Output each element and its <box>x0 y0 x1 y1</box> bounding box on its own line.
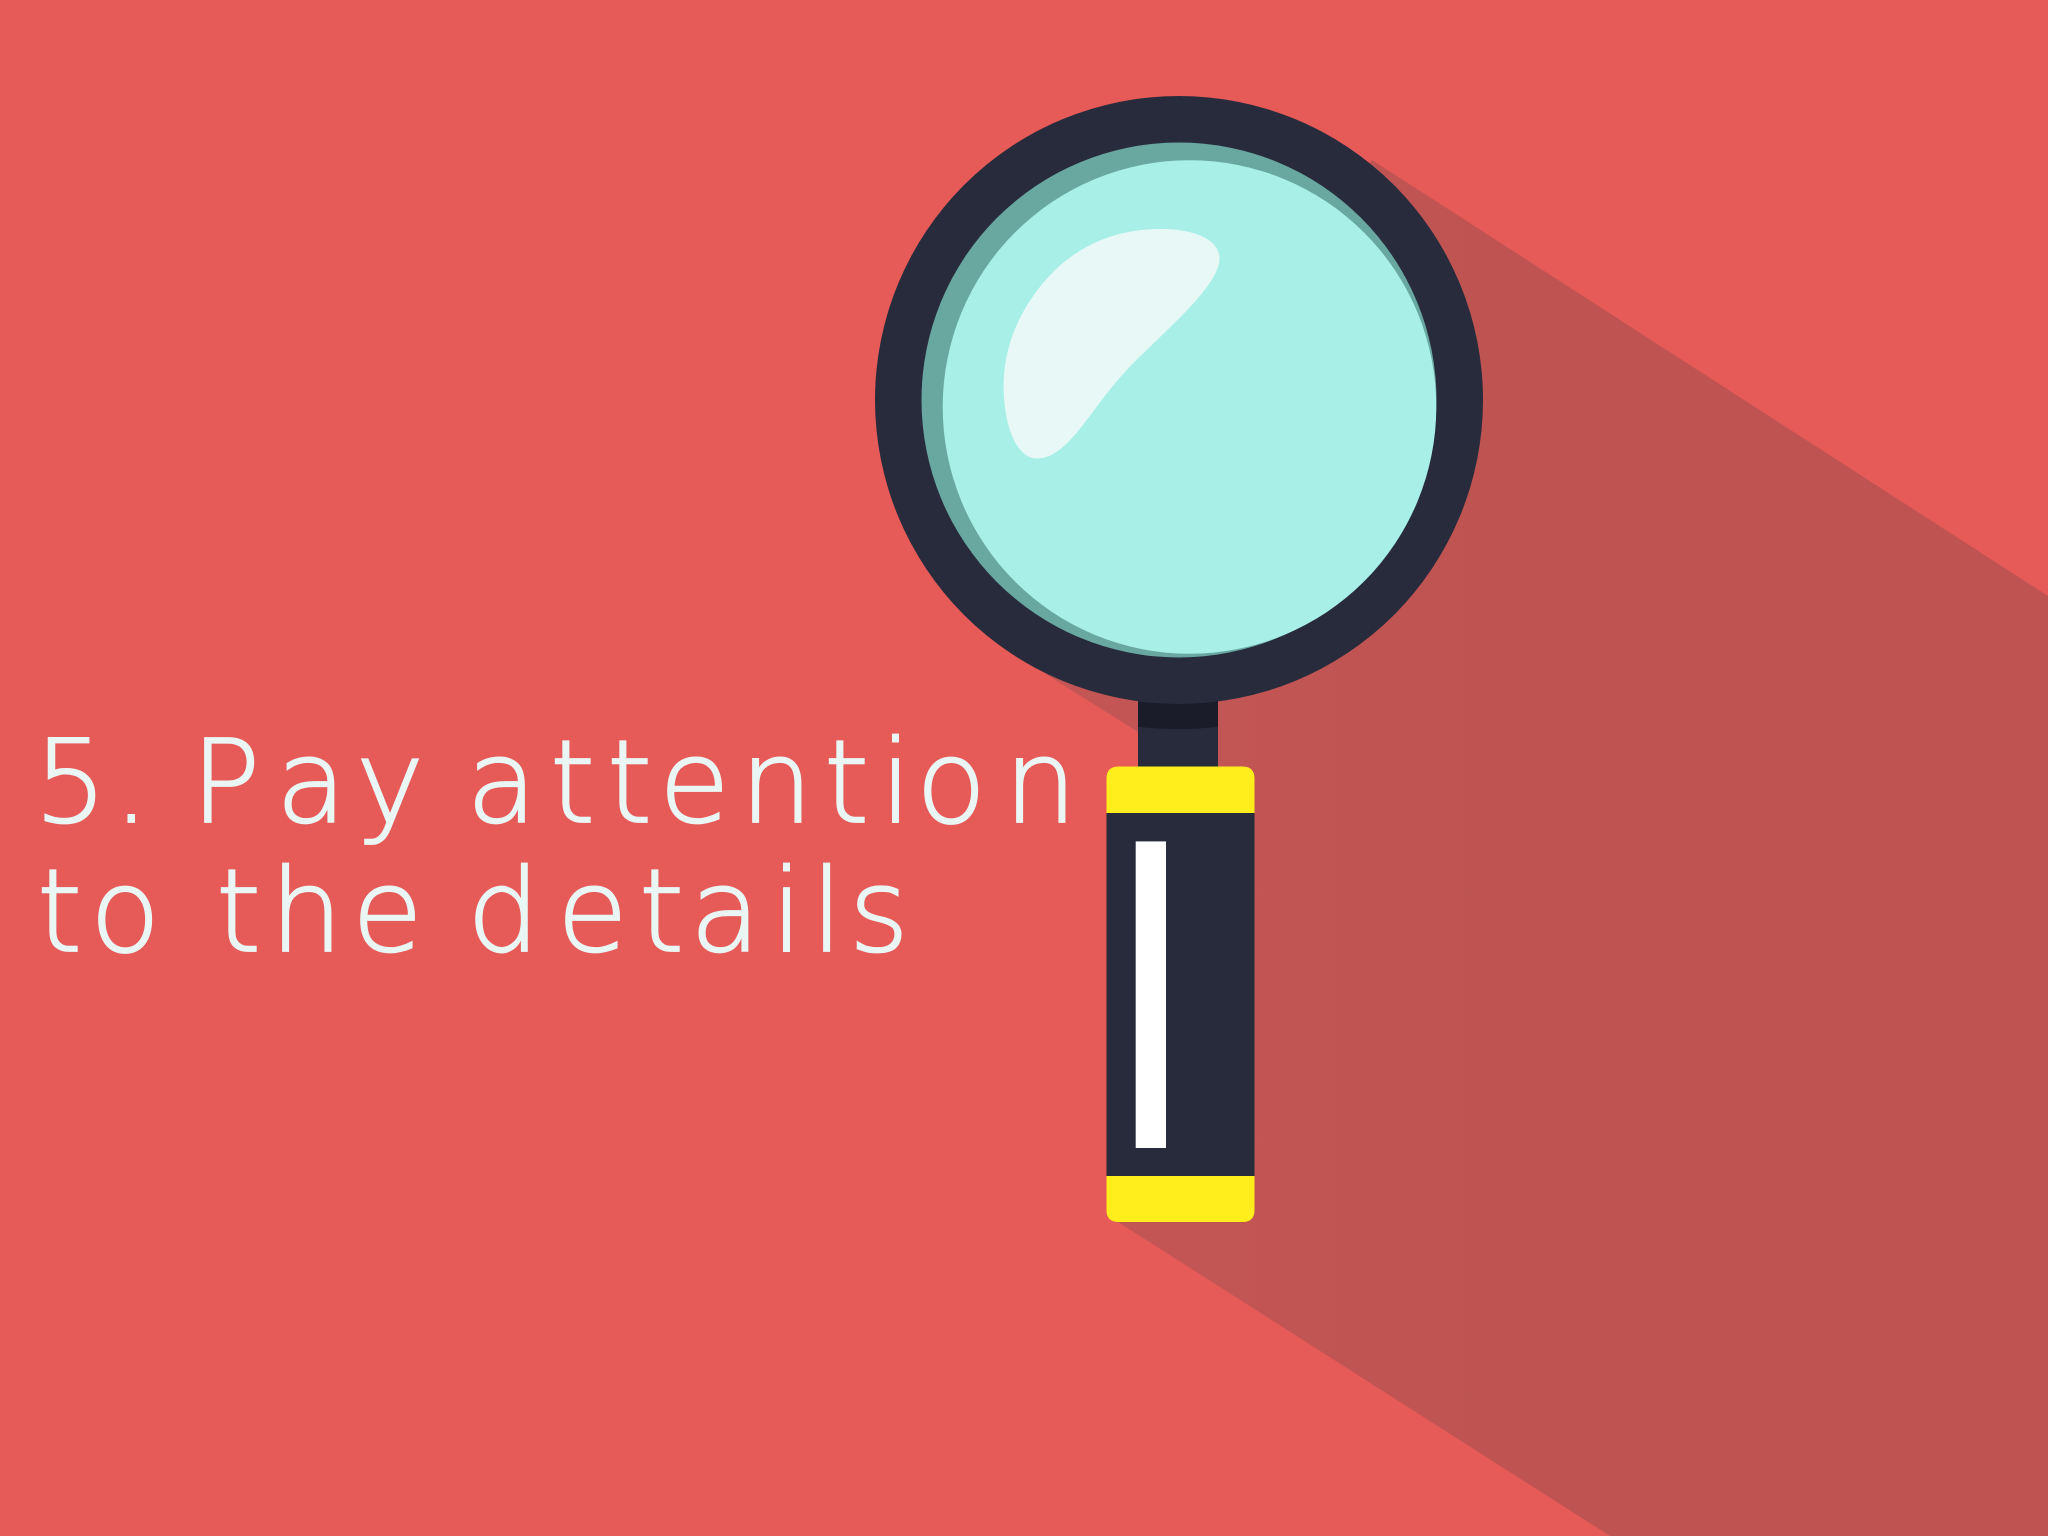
lens rim <box>875 96 1483 704</box>
lens inner shade <box>922 142 1436 658</box>
handle top yellow band <box>1106 766 1254 813</box>
title line 1: 5. Pay attention <box>34 716 1077 850</box>
handle white stripe <box>1136 841 1166 1148</box>
title text <box>34 716 1077 979</box>
handle bottom yellow band <box>1106 1176 1254 1222</box>
handle grip <box>1106 813 1254 1176</box>
icon: magnifying glass <box>875 96 1483 1222</box>
neck of handle <box>1138 690 1218 770</box>
title line 2: to the details <box>37 845 909 979</box>
long shadow of magnifying glass <box>1036 160 2048 1536</box>
lens highlight <box>1004 229 1220 458</box>
handle <box>1106 766 1254 1222</box>
lens glass <box>943 160 1436 654</box>
